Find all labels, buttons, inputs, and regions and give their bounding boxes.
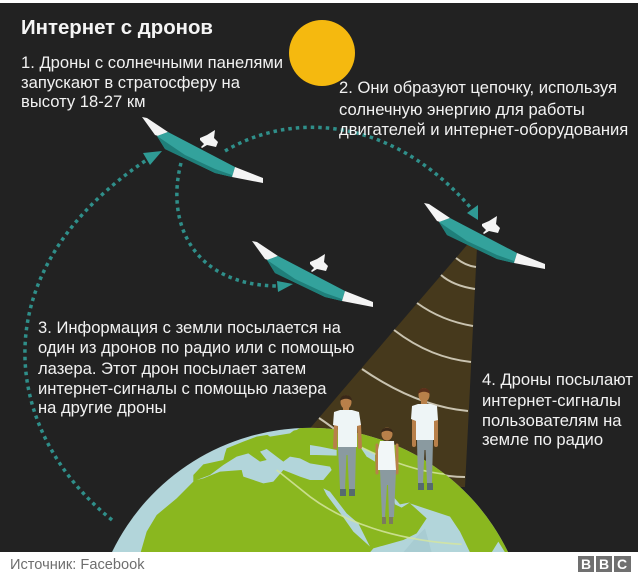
right wing tip xyxy=(232,167,263,183)
tail xyxy=(200,130,218,148)
dotted path: drone 1 to drone 3 xyxy=(225,127,478,220)
Black Sea xyxy=(310,445,337,456)
step 1 text: 1. Дроны с солнечными панелями xyxy=(21,53,283,72)
arms xyxy=(377,445,397,473)
arms xyxy=(414,420,436,445)
globe xyxy=(112,428,508,552)
top seas xyxy=(267,430,294,437)
source: Источник: Facebook xyxy=(10,557,145,573)
person 3 xyxy=(411,388,438,490)
shoes xyxy=(340,489,355,496)
Arabian Sea shade xyxy=(403,528,432,552)
Red Sea xyxy=(323,488,370,547)
Mediterranean xyxy=(197,449,332,483)
solar wing xyxy=(157,132,235,177)
step 4 text: 4. Дроны посылают xyxy=(482,370,633,389)
shirt xyxy=(411,404,438,440)
step 2 text: 2. Они образуют цепочку, используя xyxy=(339,78,617,97)
step 3 text: на другие дроны xyxy=(38,398,166,417)
sun xyxy=(289,20,355,86)
tank top xyxy=(378,441,396,470)
step 2 text: солнечную энергию для работы xyxy=(339,100,585,119)
step 3 text: один из дронов по радио или с помощью xyxy=(38,338,354,357)
India tip xyxy=(492,542,505,552)
arms xyxy=(335,425,360,447)
step 2 text: двигателей и интернет-оборудования xyxy=(339,120,628,139)
BBC logo: B xyxy=(599,556,609,572)
shirt xyxy=(333,410,361,447)
step 4 text: земле по радио xyxy=(482,430,603,449)
step 3 text: интернет-сигналы с помощью лазера xyxy=(38,379,327,398)
BBC logo: C xyxy=(617,556,627,572)
neck and head xyxy=(343,407,349,412)
legs xyxy=(380,470,396,517)
globe ocean xyxy=(112,428,508,552)
drone 1 xyxy=(142,117,263,183)
neck and head xyxy=(421,401,427,406)
dotted path: ground to drone 1 xyxy=(25,151,162,520)
step 4 text: пользователям на xyxy=(482,411,622,430)
arrowhead xyxy=(143,151,162,165)
head xyxy=(382,428,392,440)
person 1 xyxy=(333,395,361,496)
green land xyxy=(140,428,508,552)
legs xyxy=(417,440,433,483)
globe land and seas xyxy=(140,428,508,552)
Arabian Sea xyxy=(370,503,470,552)
drone 2 xyxy=(252,241,373,307)
shoes xyxy=(382,517,393,524)
step 1 text: высоту 18-27 км xyxy=(21,92,146,111)
north sea patch xyxy=(360,447,375,462)
satellite arc lines xyxy=(277,447,462,544)
step 3 text: лазера. Этот дрон посылает затем xyxy=(38,359,306,378)
signal beam xyxy=(300,245,477,487)
BBC logo xyxy=(578,556,631,572)
shoes xyxy=(418,483,433,490)
wing underside xyxy=(157,136,232,177)
step 3 text: 3. Информация с земли посылается на xyxy=(38,318,342,337)
BBC logo: B xyxy=(581,556,591,572)
Persian Gulf xyxy=(394,498,410,508)
arrowhead xyxy=(277,281,293,292)
left wing tip xyxy=(142,117,168,136)
title: Интернет с дронов xyxy=(21,17,213,39)
legs xyxy=(338,447,356,489)
dotted path: drone 1 to drone 2 xyxy=(177,163,293,292)
drone 3 xyxy=(424,203,545,269)
person 2 xyxy=(377,428,397,524)
arrowhead xyxy=(467,205,478,220)
step 1 text: запускают в стратосферу на xyxy=(21,73,241,92)
step 4 text: интернет-сигналы xyxy=(482,391,621,410)
